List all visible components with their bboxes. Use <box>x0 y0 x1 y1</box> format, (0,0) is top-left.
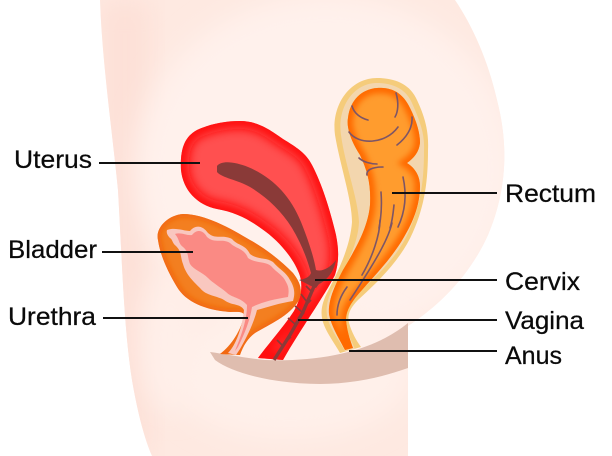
bladder wall <box>158 214 301 355</box>
label: Uterus: Uterus <box>14 146 92 174</box>
label: Vagina: Vagina <box>505 307 584 335</box>
bladder lining <box>167 227 294 355</box>
uterus and vagina <box>175 118 343 363</box>
uterine cavity and vaginal canal <box>217 162 336 360</box>
label: Cervix: Cervix <box>505 268 581 296</box>
bladder and urethra <box>158 214 301 355</box>
bladder cavity <box>175 231 289 351</box>
rectum muscle <box>328 88 420 350</box>
uterus wall <box>175 118 343 363</box>
label: Rectum: Rectum <box>505 180 596 208</box>
label: Urethra: Urethra <box>8 303 96 331</box>
label: Anus: Anus <box>505 342 562 370</box>
body silhouette <box>100 0 515 456</box>
rectum and anus <box>322 78 428 355</box>
rectum folds <box>337 93 412 315</box>
label: Bladder: Bladder <box>8 236 97 264</box>
pelvic floor shadow <box>210 323 408 384</box>
rectum inner lining <box>327 83 424 351</box>
rectum outer wall <box>322 78 428 353</box>
